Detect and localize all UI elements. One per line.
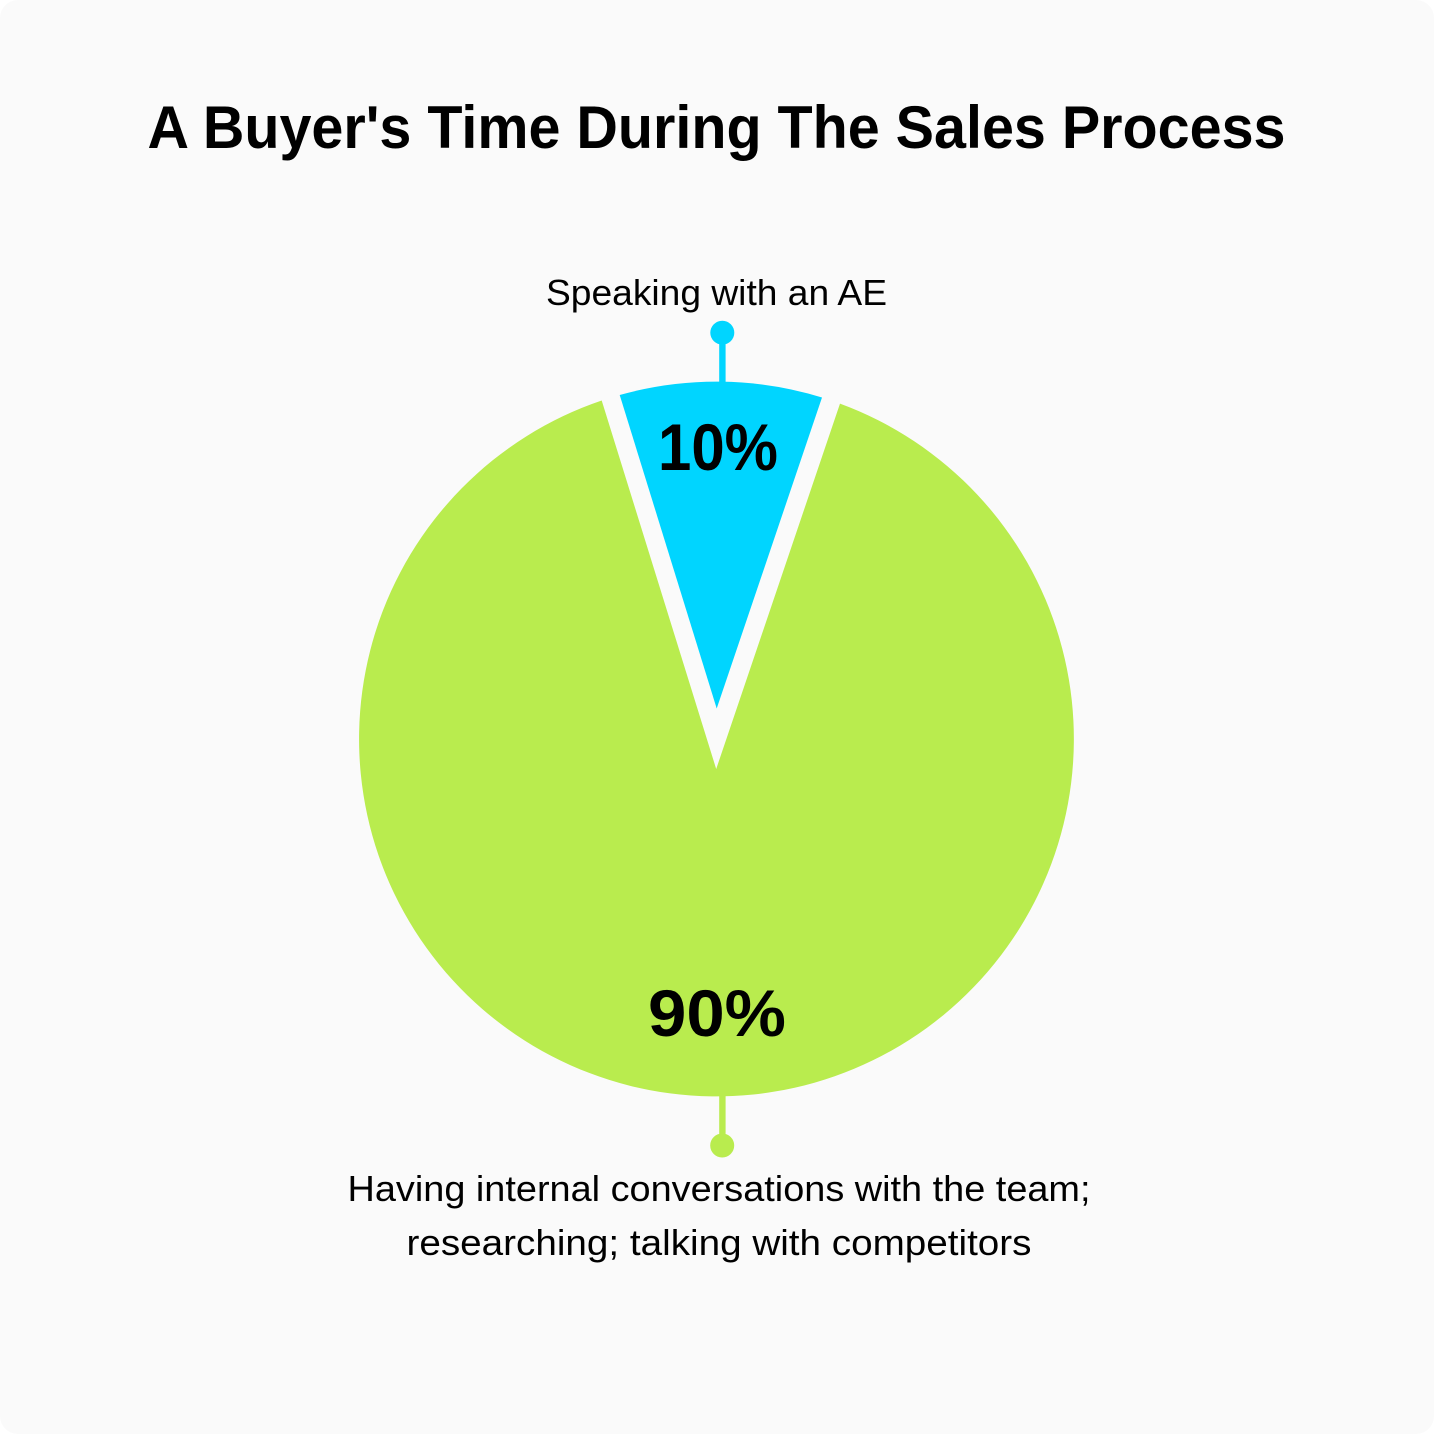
pie chart xyxy=(359,382,1074,1096)
label text line 2: researching; talking with competitors xyxy=(406,1222,1032,1263)
connector line xyxy=(719,1095,726,1143)
title: A Buyer's Time During The Sales Process xyxy=(148,94,1286,161)
value label: 10%: 10% xyxy=(658,410,778,484)
label text: Speaking with an AE xyxy=(546,272,887,313)
slice: 90% xyxy=(359,400,1074,1096)
callout: Speaking with an AE xyxy=(546,272,887,383)
connector dot xyxy=(710,1134,734,1158)
connector line xyxy=(719,335,726,383)
connector dot xyxy=(710,321,734,345)
value label: 90%: 90% xyxy=(648,976,786,1050)
callout: Having internal conversations xyxy=(348,1095,1090,1263)
label text: Having internal conversations with the team; xyxy=(348,1168,1090,1209)
slice: 10% xyxy=(620,382,822,708)
